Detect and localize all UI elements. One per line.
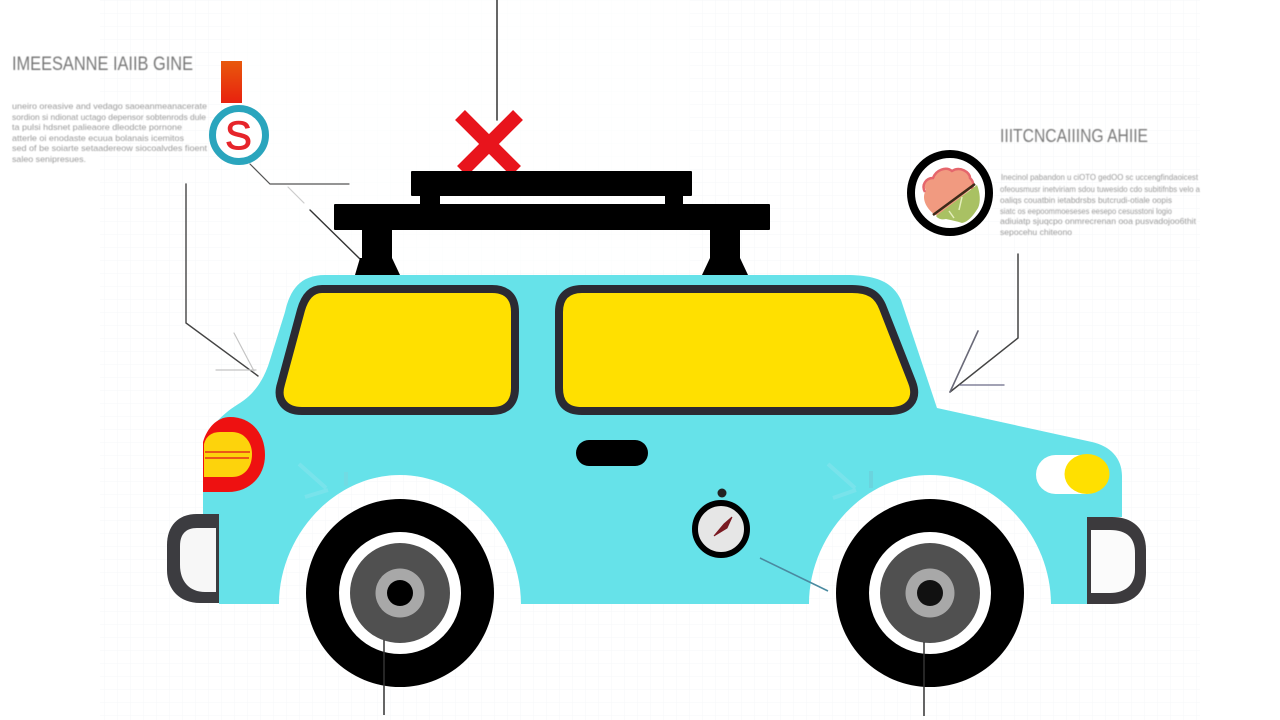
text block: right callout body — [1000, 172, 1200, 237]
tail light — [203, 417, 265, 492]
text block: left callout body: atterle oi enodaste ecuua bolanais icemitos — [12, 133, 184, 143]
text block: right callout body: sepocehu chiteono — [1000, 227, 1072, 237]
text block: left callout body: saleo senipresues. — [12, 154, 86, 164]
icon: S badge — [212, 108, 266, 162]
text block: right callout body: Inecinol pabandon u ciOTO gedOO sc uccengfindaoicest — [1001, 172, 1199, 182]
arrow: left callout leader — [186, 184, 258, 376]
door handle — [576, 440, 648, 466]
faint reflections on body — [299, 464, 871, 498]
text block: left callout body — [12, 101, 208, 164]
text block: right callout body: oaliqs couatbin ietabdrsbs butcrudi-otiale oopis — [1000, 195, 1172, 205]
arrow: top leader — [496, 0, 498, 120]
leader lines — [186, 0, 1018, 392]
text block: right callout body: ofeousmusr inetviriam sdou tuwesido cdo subitifnbs velo a — [1000, 184, 1200, 194]
gauge — [695, 488, 747, 555]
icon: food badge — [911, 154, 989, 232]
text block: right callout body: siatc os eepoommoeseses eesepo cesusstoni logio — [1000, 206, 1172, 216]
roof rack — [334, 171, 770, 275]
panel: right callout text — [1000, 126, 1200, 237]
window: rear — [280, 289, 515, 411]
rear bumper — [167, 514, 219, 603]
front bumper — [1087, 517, 1146, 604]
heading: right callout: IIITCNCAIIING AHIIE — [1000, 126, 1148, 146]
car body — [203, 275, 1122, 604]
window: front — [559, 289, 914, 411]
arrow: front wheel leader — [923, 642, 925, 716]
icon: S badge: S — [225, 114, 252, 158]
arrow: rear wheel leader — [383, 640, 385, 715]
text block: left callout body: sed of be soiarte setaadereow siocoalvdes fioent — [12, 143, 208, 153]
icon: red exclamation bar — [221, 61, 242, 103]
heading: left callout: IMEESANNE IAIIB GINE — [12, 54, 193, 75]
wheel: rear — [306, 499, 494, 687]
text block: left callout body: ta pulsi hdsnet palieaore dleodcte pornone — [12, 122, 182, 132]
head light — [1036, 454, 1110, 494]
text block: left callout body: uneiro oreasive and vedago saoeanmeanacerate — [12, 101, 207, 111]
arrow: gauge leader — [760, 558, 828, 591]
icon: red X — [460, 115, 518, 171]
arrow: right callout leader — [950, 254, 1018, 392]
panel: left callout text — [12, 54, 208, 164]
text block: left callout body: sordion si ndionat uctago depensor sobtenrods dule — [12, 112, 206, 122]
arrow: badge leader — [250, 164, 360, 259]
wheel: front — [836, 499, 1024, 687]
text block: right callout body: adiuiatp sjuqcpo onmrecrenan ooa pusvadojoo6thit — [1000, 216, 1197, 226]
